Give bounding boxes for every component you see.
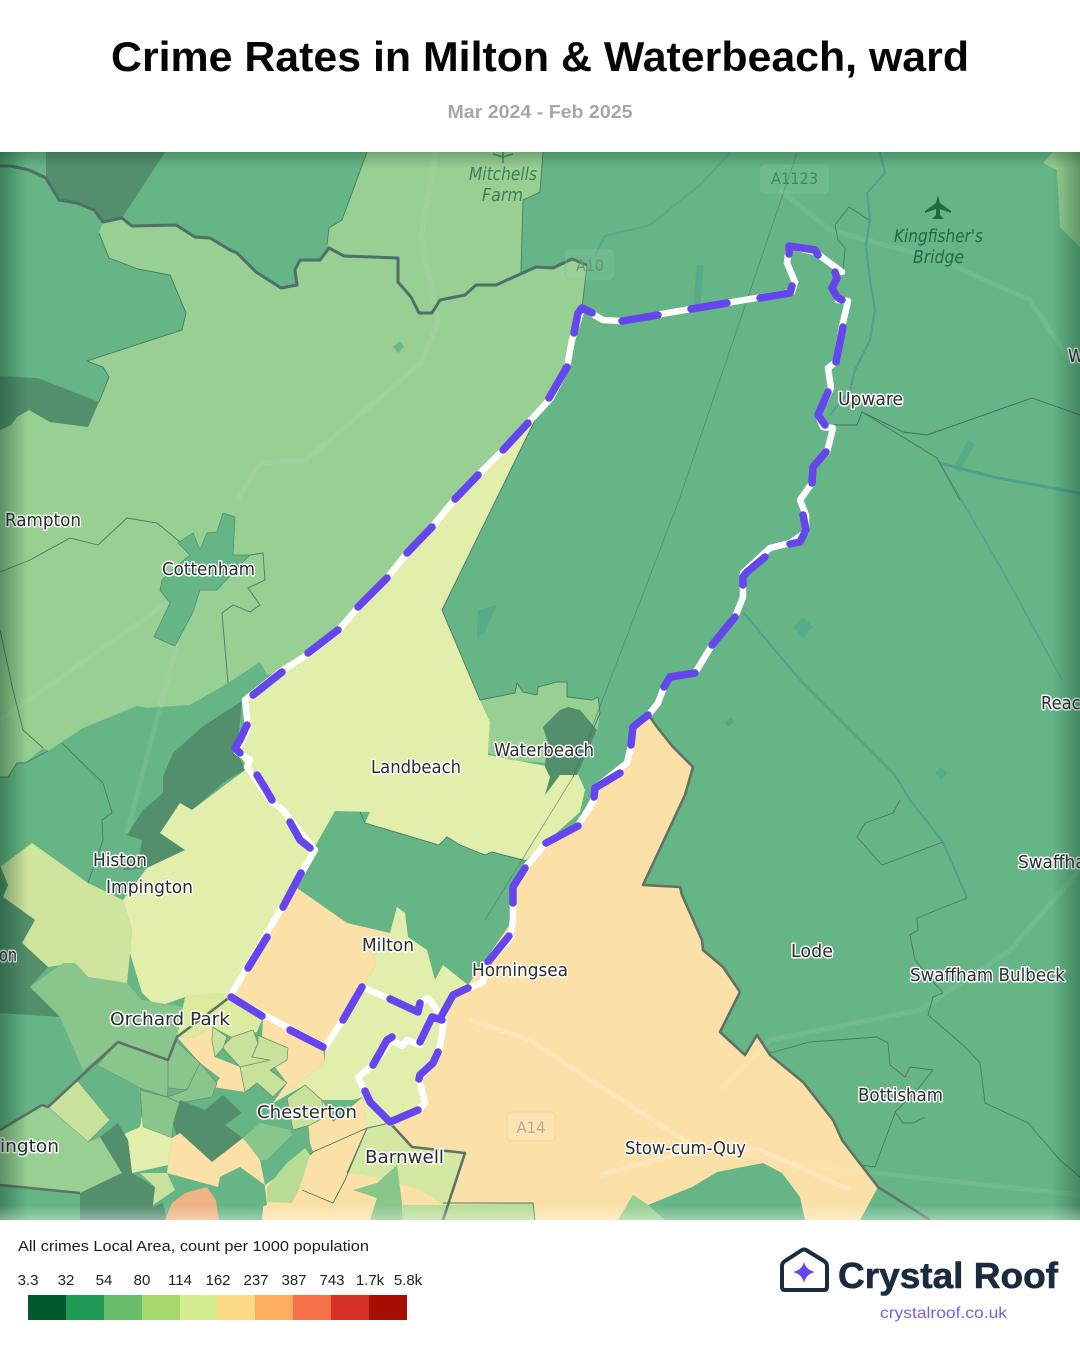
label: Landbeach: Landbeach xyxy=(371,757,461,778)
area: Impington yellow zone xyxy=(123,770,313,1007)
area: bottom left mid cell xyxy=(77,1065,140,1142)
road label: A14: A14 xyxy=(516,1118,546,1137)
area: far west dark zone xyxy=(0,865,60,1017)
legend tick labels: 5.8k xyxy=(394,1272,423,1289)
label: Orchard Park: Orchard Park xyxy=(110,1009,231,1030)
area: bottom left yellow strip xyxy=(122,1115,172,1173)
legend tick labels: 54 xyxy=(96,1272,112,1289)
label: Lode: Lode xyxy=(791,941,833,962)
label: Horningsea: Horningsea xyxy=(472,960,568,981)
legend title: All crimes Local Area, count per 1000 population xyxy=(18,1238,369,1255)
map edge vignette xyxy=(0,152,1080,1220)
legend tick labels: 32 xyxy=(58,1272,74,1289)
area: large light-green ward xyxy=(0,218,587,777)
website url: crystalroof.co.uk xyxy=(880,1305,1008,1322)
label: Kingfisher's Bridge xyxy=(894,227,983,268)
label: Barnwell: Barnwell xyxy=(365,1147,444,1168)
area: north farm light zone xyxy=(327,152,543,313)
area: south cream wedge xyxy=(262,1017,325,1103)
white ward boundary xyxy=(230,246,848,1123)
legend tick labels: 387 xyxy=(281,1272,307,1289)
area: north-west of Orchard Park xyxy=(30,963,183,1070)
area: Chesterton west cells xyxy=(97,1042,168,1097)
thick grey district boundary xyxy=(0,717,930,1220)
road label: A10 xyxy=(566,250,613,279)
ward outline: white line with purple dashes xyxy=(230,246,848,1123)
road label: A10: A10 xyxy=(576,256,604,275)
area: Waterbeach light zone xyxy=(480,682,600,765)
label: Kingfisher's Bridge: Kingfisher's xyxy=(894,227,983,247)
area: light south cell xyxy=(140,1173,175,1205)
label: Kingfisher's Bridge: Bridge xyxy=(913,248,964,268)
area: west dark strip xyxy=(0,376,99,430)
label: Upware: Upware xyxy=(838,389,903,410)
place labels xyxy=(0,346,1080,1168)
area: Milton village yellow zone xyxy=(273,907,468,1128)
label: Mitchells Farm: Mitchells xyxy=(469,165,537,185)
area: Barnwell yellow zone xyxy=(347,1123,465,1205)
area: mid-green Chesterton cell xyxy=(223,1083,258,1138)
map panel: choropleth of crime rates xyxy=(0,152,1080,1220)
legend tick labels xyxy=(18,1272,423,1289)
label: Chesterton: Chesterton xyxy=(257,1102,357,1123)
legend tick labels: 1.7k xyxy=(356,1272,385,1289)
label: Mitchells Farm xyxy=(469,165,537,206)
label: Swaffham Bulbeck: Swaffham Bulbeck xyxy=(910,965,1066,986)
area: bottom left light zone xyxy=(0,1105,122,1193)
icon: tree at Mitchells Farm xyxy=(493,152,513,163)
label: Grantchester/Girton fragment: ington xyxy=(0,1136,59,1157)
legend tick labels: 743 xyxy=(319,1272,345,1289)
area: Orchard Park cream cell xyxy=(177,1027,245,1092)
area: green blob xyxy=(220,1167,267,1210)
area: Orchard Park small cells xyxy=(223,1030,268,1068)
legend tick labels: 80 xyxy=(134,1272,150,1289)
label: Cottenham: Cottenham xyxy=(162,559,255,580)
area: cream cell south xyxy=(167,1133,265,1187)
label: Mitchells Farm: Farm xyxy=(482,186,523,206)
logo: Crystal Roof xyxy=(782,1250,1059,1322)
area: main cream zone east of ward xyxy=(262,717,878,1220)
area: King's Hedges dark cell xyxy=(173,1095,243,1162)
area: Barnwell green blob xyxy=(353,1165,403,1220)
label: Bottisham: Bottisham xyxy=(858,1085,943,1106)
area: Waterbeach dark zone xyxy=(543,707,597,795)
legend tick labels: 162 xyxy=(205,1272,231,1289)
purple dashes xyxy=(231,246,843,1122)
icon: house with star xyxy=(782,1250,827,1290)
area: top-left dark zone xyxy=(46,152,165,222)
road label: A14 xyxy=(507,1112,555,1141)
legend tick labels: 114 xyxy=(168,1272,192,1289)
area: south green strip xyxy=(403,1203,535,1220)
legend tick labels: 237 xyxy=(243,1272,269,1289)
area: bottom left yellow-green xyxy=(48,1080,110,1142)
title: Crime Rates in Milton & Waterbeach, ward xyxy=(111,33,969,80)
roads: faint lighter lines xyxy=(0,153,1080,1195)
area: Chesterton light cells xyxy=(243,1123,292,1160)
small map features: buildings and ponds xyxy=(393,265,975,780)
legend colour scale xyxy=(28,1295,407,1320)
area: top right light corner xyxy=(1043,152,1080,247)
area: bottom-left base xyxy=(0,1185,80,1220)
wordmark: Crystal Roof xyxy=(838,1255,1059,1296)
label: Milton: Milton xyxy=(362,935,414,956)
railway and thin ward boundaries xyxy=(0,152,1080,1220)
area: Orchard Park yellow cell xyxy=(177,993,263,1038)
label: Histon: Histon xyxy=(93,850,147,871)
label: Impington: Impington xyxy=(106,877,193,898)
label: Rampton: Rampton xyxy=(5,510,81,531)
subtitle: date range: Mar 2024 - Feb 2025 xyxy=(448,102,632,122)
area: Cottenham xyxy=(154,513,250,646)
area: west yellow-green zone xyxy=(0,843,132,983)
map road labels xyxy=(507,165,828,1141)
label: Stow-cum-Quy: Stow-cum-Quy xyxy=(625,1138,746,1159)
label: Waterbeach: Waterbeach xyxy=(494,740,594,761)
legend xyxy=(18,1238,423,1320)
area: Milton west cream zone xyxy=(230,888,390,1048)
icon: airfield plane xyxy=(925,195,951,219)
area: bottom left dark zone xyxy=(80,1123,167,1220)
area: Landbeach ward xyxy=(237,410,585,860)
area: Quy south light patch xyxy=(618,1195,665,1220)
road label: A1123 xyxy=(761,165,828,193)
legend tick labels: 3.3 xyxy=(18,1272,38,1289)
road label: A1123: A1123 xyxy=(771,169,818,188)
rivers: teal waterways xyxy=(595,152,1080,898)
area: orange cell xyxy=(165,1187,219,1220)
area: Histon dark zone xyxy=(122,697,248,870)
river boundary xyxy=(0,166,587,313)
